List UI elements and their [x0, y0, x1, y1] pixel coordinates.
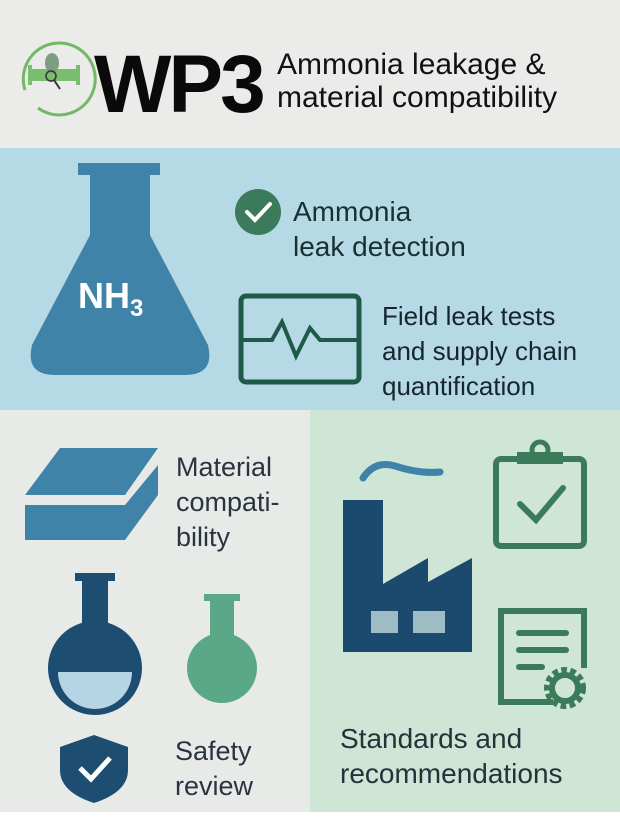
- icon: check circle: [235, 189, 281, 235]
- text: ammonia leak detection: leak detection: [293, 231, 466, 262]
- text: field leak tests: Field leak tests: [382, 301, 555, 331]
- icon: document with gear: [501, 611, 584, 704]
- icon: NH3 flask: 3: [130, 295, 143, 322]
- icon: factory: [343, 464, 472, 652]
- text: standards and recommendations: Standards and: [340, 723, 522, 754]
- panel: header: material compatibility: [277, 81, 557, 114]
- text: material compatibility: bility: [176, 522, 231, 552]
- text: field leak tests: and supply chain: [382, 336, 577, 366]
- icon: green flask: [187, 594, 257, 703]
- icon: NH3 flask: [31, 163, 209, 375]
- icon: clipboard: [496, 442, 584, 546]
- text: standards and recommendations: recommendations: [340, 758, 563, 789]
- panel: header: [0, 0, 620, 148]
- text: material compatibility: compati-: [176, 487, 280, 517]
- text: material compatibility: Material: [176, 452, 272, 482]
- text: standards and recommendations: [340, 723, 563, 789]
- panel: material compatibility and safety: [0, 410, 310, 812]
- title: WP3: WP3: [94, 39, 263, 130]
- icon: shield: [60, 735, 128, 803]
- icon: round flask: [48, 573, 142, 715]
- text: safety review: [175, 736, 254, 801]
- icon: logo: [23, 43, 95, 115]
- text: material compatibility: [176, 452, 280, 552]
- text: safety review: review: [175, 771, 254, 801]
- text: ammonia leak detection: Ammonia: [293, 196, 412, 227]
- text: field leak tests: [382, 301, 577, 401]
- icon: NH3 flask: NH: [78, 275, 130, 316]
- panel: standards: [310, 410, 620, 812]
- icon: monitor: [241, 296, 359, 382]
- text: safety review: Safety: [175, 736, 252, 766]
- panel: leak detection: [0, 148, 620, 410]
- subtitle: Ammonia leakage &: [277, 48, 545, 81]
- text: ammonia leak detection: [293, 196, 466, 262]
- text: field leak tests: quantification: [382, 371, 535, 401]
- icon: slab: [25, 448, 158, 540]
